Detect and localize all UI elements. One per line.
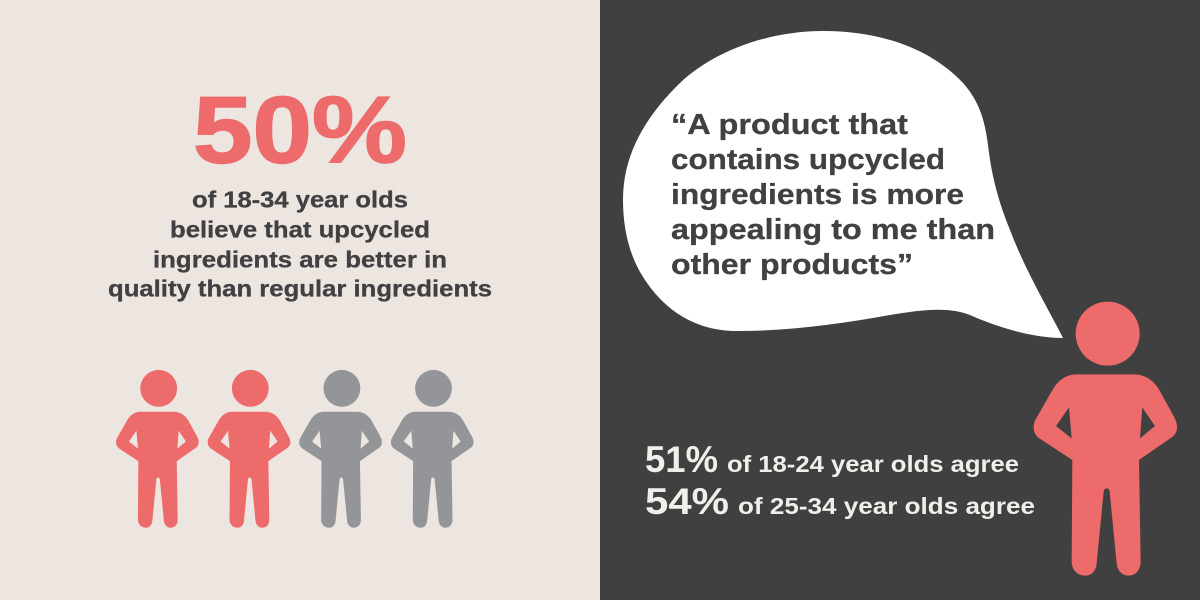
quote text: “A product that xyxy=(671,109,908,141)
statistic: 25-34 year olds: 54% xyxy=(645,481,729,522)
icon: person 4 grey xyxy=(391,370,474,528)
text block: 50% description: believe that upcycled xyxy=(170,216,430,242)
panel: left background xyxy=(0,0,600,600)
speech bubble xyxy=(623,31,1063,338)
statistic: 18-24 year olds: 51% xyxy=(645,439,718,480)
icon row: four people, two highlighted xyxy=(116,370,474,528)
text block: 50% description xyxy=(108,186,492,302)
icon: person 2 red xyxy=(208,370,290,528)
quote text: other products” xyxy=(671,249,913,281)
text block: 50% description: of 18-34 year olds xyxy=(192,186,408,212)
panel: right background xyxy=(600,0,1200,600)
quote text: ingredients is more xyxy=(671,179,964,211)
icon: person 3 grey xyxy=(299,370,382,528)
statistic: 18-24 year olds xyxy=(645,439,1019,480)
statistic: 25-34 year olds xyxy=(645,481,1035,522)
icon: large person speaking xyxy=(1034,302,1177,576)
quote text xyxy=(671,109,995,281)
quote text: appealing to me than xyxy=(671,214,995,246)
statistic: 18-24 year olds: of 18-24 year olds agree xyxy=(727,451,1019,477)
quote text: contains upcycled xyxy=(671,144,945,176)
text block: 50% description: ingredients are better in xyxy=(153,246,447,272)
icon: person 1 red xyxy=(116,370,199,528)
big statistic: 50%: 50% xyxy=(193,78,407,184)
text block: 50% description: quality than regular ingredients xyxy=(108,276,492,302)
statistic: 25-34 year olds: of 25-34 year olds agree xyxy=(738,493,1035,519)
